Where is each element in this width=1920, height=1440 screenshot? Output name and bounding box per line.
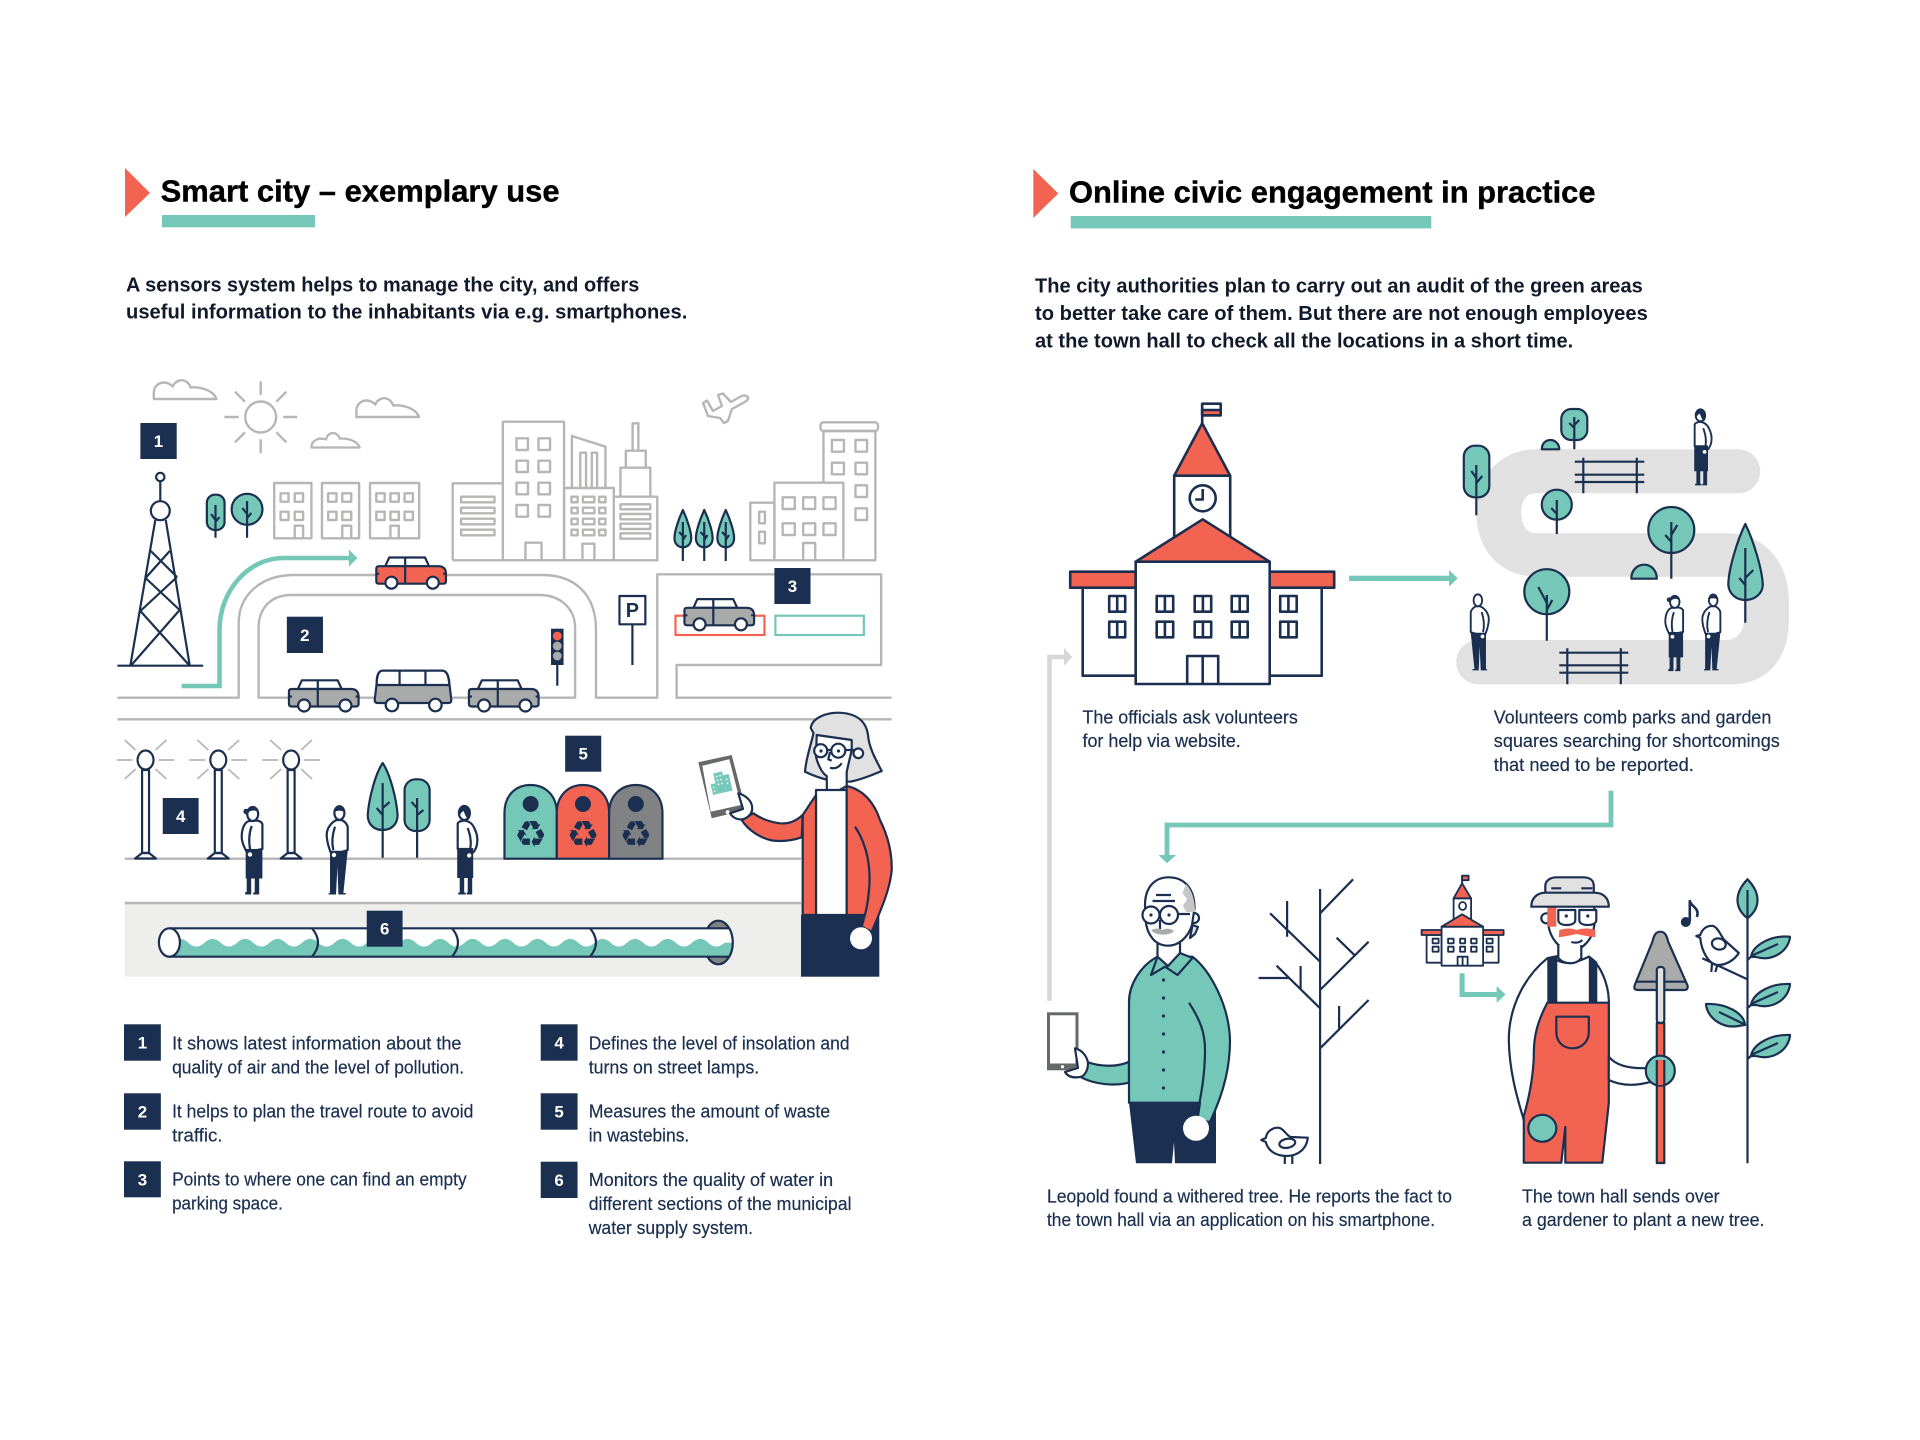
panel: smart city heading [125, 168, 560, 227]
right buildings [750, 422, 878, 560]
traffic jam: grey car [469, 680, 539, 712]
badge 5 on map: 5 [578, 745, 588, 764]
icon: traffic light [551, 629, 564, 686]
legend item 6: different sections of the municipal [589, 1193, 852, 1214]
Leopold: hand on side [1183, 1116, 1209, 1141]
icon: sun [224, 381, 297, 453]
legend item 5: Measures the amount of waste [589, 1101, 830, 1122]
red car on detour [376, 558, 446, 589]
badge 1 on map [140, 423, 177, 459]
badge 3 on map [774, 568, 811, 604]
arrow: town hall to park [1349, 570, 1458, 587]
legend item 2: It helps to plan the travel route to avoid [172, 1100, 473, 1121]
icon: parking sign: P [626, 600, 639, 622]
city map layer [117, 380, 892, 947]
caption: Leopold: Leopold found a withered tree. He reports the fact to [1047, 1185, 1452, 1206]
legend item 6: water supply system. [588, 1217, 753, 1238]
badge 1 on map: 1 [154, 432, 163, 451]
park benches [1559, 458, 1644, 684]
icon: plane [703, 394, 748, 423]
smart waste bins: ♻ [514, 813, 547, 856]
trees near small buildings [207, 494, 262, 538]
legend item 5: 5 [554, 1102, 564, 1122]
caption: Leopold: the town hall via an application on his smartphone. [1047, 1209, 1435, 1230]
intro text: civic engagement: The city authorities plan to carry out an audit of the green areas [1035, 276, 1643, 298]
illustration: park with volunteers [1456, 409, 1789, 684]
clock [1190, 485, 1216, 511]
woman: hair [805, 713, 882, 782]
caption: officials: for help via website. [1082, 730, 1241, 751]
legend item 1 [124, 1024, 464, 1077]
woman: cardigan [803, 795, 816, 915]
volunteers [1471, 409, 1720, 671]
title: civic engagement: Online civic engagement in practice [1069, 175, 1596, 210]
caption: Leopold [1047, 1185, 1452, 1230]
legend item 1: quality of air and the level of pollution. [172, 1056, 464, 1077]
arrow: suggested route [182, 550, 357, 686]
town hall flag [1202, 404, 1221, 415]
legend item 4: Defines the level of insolation and [589, 1032, 850, 1053]
legend item 3 [124, 1161, 467, 1214]
woman: shirt [816, 790, 847, 915]
illustration: smart city scene [117, 380, 892, 977]
arrow: park to Leopold [1158, 791, 1611, 863]
title: smart city: Smart city – exemplary use [161, 174, 560, 209]
icon: small town hall [1422, 876, 1504, 966]
pedestrians [242, 806, 477, 894]
smart waste bins: ♻ [566, 813, 599, 856]
illustration: young plant [1706, 879, 1790, 1163]
legend item 5: in wastebins. [589, 1125, 689, 1146]
gardener: head [1541, 906, 1596, 963]
panel: civic engagement heading [1033, 169, 1596, 228]
town hall windows [1109, 596, 1297, 637]
heading marker [1033, 169, 1058, 218]
town hall door [1187, 656, 1218, 684]
pavement with water pipe background [125, 903, 805, 977]
legend item 2 [124, 1093, 473, 1145]
legend item 3: parking space. [172, 1193, 283, 1214]
gardener: overalls [1524, 1003, 1609, 1163]
illustration: gardener [1509, 877, 1688, 1163]
gardener: gloves [1528, 1056, 1675, 1142]
icon: music note [1681, 901, 1698, 927]
Leopold: shirt [1129, 957, 1230, 1122]
traffic jam: grey car [289, 680, 359, 712]
caption: gardener: The town hall sends over [1522, 1185, 1720, 1206]
icon: singing bird [1696, 926, 1747, 979]
icon: parking sign [619, 596, 645, 665]
woman: left arm [742, 813, 803, 841]
street lamps [117, 740, 320, 858]
badge 2 on map: 2 [300, 626, 310, 645]
badge 2 on map [287, 617, 323, 653]
gardener: arm [1609, 1057, 1651, 1085]
Leopold: hand [1065, 1048, 1088, 1077]
legend item 4 [541, 1024, 850, 1077]
intro text: civic engagement: to better take care of them. But there are not enough employees [1035, 303, 1648, 325]
caption: volunteers: squares searching for shortcomings [1494, 730, 1780, 751]
arrow: smartphone back to town hall [1050, 648, 1072, 1001]
street trees [368, 763, 430, 858]
illustration: town hall [1070, 404, 1334, 684]
woman: hand [730, 793, 752, 819]
legend item 6: Monitors the quality of water in [589, 1169, 833, 1190]
caption: volunteers: that need to be reported. [1494, 754, 1694, 775]
illustration: withered tree [1259, 879, 1369, 1164]
smart waste bins: ♻ [619, 813, 652, 856]
caption: officials: The officials ask volunteers [1082, 706, 1298, 727]
parking spaces with car [675, 599, 864, 635]
icon: bird by the withered tree [1261, 1128, 1308, 1164]
city centre buildings [453, 422, 657, 560]
legend: sensor list [124, 1024, 852, 1238]
intro text: civic engagement: at the town hall to check all the locations in a short time. [1035, 330, 1573, 352]
badge 6 on map: 6 [380, 920, 389, 939]
legend item 3: 3 [138, 1170, 147, 1189]
smart waste bins [504, 785, 662, 859]
heading marker [125, 168, 150, 217]
woman with tablet [698, 713, 892, 977]
park path [1456, 449, 1789, 684]
Leopold: buttons [1162, 978, 1165, 1090]
caption: gardener: a gardener to plant a new tree. [1522, 1209, 1764, 1230]
icon: tablet [698, 755, 746, 818]
caption: volunteers [1494, 706, 1780, 775]
legend item 5 [541, 1093, 830, 1146]
illustration: Leopold with smartphone [1047, 877, 1230, 1163]
badge 3 on map: 3 [788, 577, 797, 596]
small buildings [274, 483, 419, 538]
intro text: civic engagement [1035, 276, 1648, 352]
caption: gardener [1522, 1185, 1764, 1230]
legend item 1: 1 [138, 1033, 147, 1053]
water pipe [159, 921, 740, 964]
legend item 4: turns on street lamps. [589, 1056, 759, 1077]
icon: shovel [1634, 932, 1688, 1163]
legend item 1: It shows latest information about the [172, 1032, 461, 1053]
badge 4 on map [163, 798, 199, 834]
caption: volunteers: Volunteers comb parks and garden [1494, 706, 1771, 727]
title underline [1071, 216, 1431, 228]
gardener: hat [1531, 877, 1609, 907]
Leopold: trousers [1129, 1103, 1216, 1163]
roads [117, 574, 892, 903]
Leopold: arm [1080, 1062, 1129, 1084]
Leopold: head [1142, 877, 1199, 946]
woman: trousers [801, 915, 879, 977]
legend item 2: 2 [138, 1102, 147, 1122]
badge 4 on map: 4 [176, 807, 186, 826]
badge 5 on map [565, 736, 601, 772]
intro text: smart city: A sensors system helps to manage the city, and offers [126, 275, 639, 297]
icon: sensor tower [117, 473, 203, 666]
caption: officials [1082, 706, 1298, 751]
legend item 2: traffic. [172, 1124, 223, 1145]
badge 6 on map [367, 911, 403, 947]
Leopold: collar [1158, 943, 1180, 968]
intro text: smart city [126, 275, 687, 324]
woman: face [816, 735, 852, 797]
legend item 3: Points to where one can find an empty [172, 1169, 467, 1190]
gardener: shirt and arm [1509, 957, 1609, 1120]
arrow: town hall to gardener [1462, 973, 1506, 1003]
woman: right hand [850, 927, 872, 949]
legend item 6 [541, 1162, 852, 1238]
three poplar trees [674, 510, 734, 561]
gardener: braces [1547, 955, 1597, 1003]
legend item 4: 4 [554, 1033, 564, 1053]
icon: clouds [154, 380, 419, 448]
icon: smartphone [1047, 1014, 1078, 1070]
title underline [162, 215, 315, 227]
intro text: smart city: useful information to the inhabitants via e.g. smartphones. [126, 302, 687, 324]
legend item 6: 6 [554, 1171, 564, 1190]
park trees [1464, 409, 1763, 641]
traffic jam: van [375, 671, 451, 711]
